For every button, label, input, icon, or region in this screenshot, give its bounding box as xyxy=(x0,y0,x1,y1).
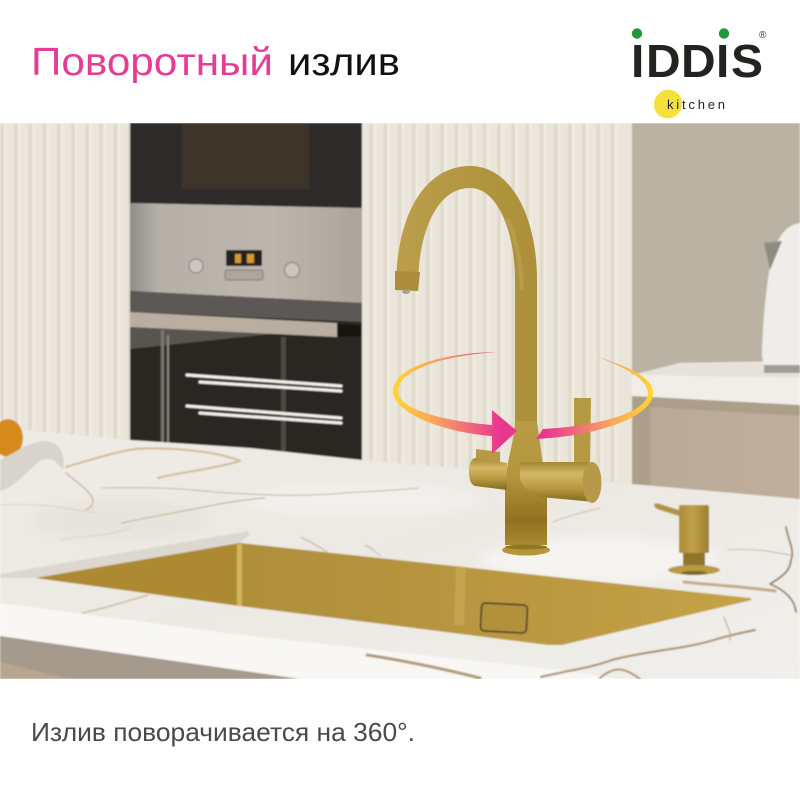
faucet body xyxy=(505,421,547,545)
left sculpture and fruit xyxy=(0,419,64,491)
counter front edge xyxy=(0,603,620,679)
logo: IDDIS kitchen: kitchen xyxy=(667,97,725,112)
title xyxy=(31,41,400,84)
panel: centre ribbed wall xyxy=(362,123,632,493)
marble veins xyxy=(0,448,796,679)
faucet base xyxy=(502,544,550,556)
wood cabinet below counter xyxy=(0,636,300,679)
title: Поворотный xyxy=(31,41,273,84)
rotation arrow left xyxy=(393,352,517,454)
rotation arrow right xyxy=(536,357,653,439)
logo: IDDIS kitchen: ® xyxy=(759,30,767,41)
kettle xyxy=(762,223,800,373)
logo: IDDIS kitchen xyxy=(631,28,767,124)
lever handle right xyxy=(574,398,591,470)
logo: IDDIS kitchen: IDDIS xyxy=(631,35,763,87)
spout tip xyxy=(395,271,420,294)
caption: Излив поворачивается на 360°. xyxy=(31,717,415,747)
faucet spout xyxy=(407,177,526,425)
left cylinder and small lever xyxy=(469,449,507,490)
pillar xyxy=(625,123,628,483)
faucet xyxy=(395,177,602,556)
right cylinder xyxy=(520,462,602,503)
right shelf counter and cabinet xyxy=(632,361,800,500)
kitchen photo xyxy=(0,123,800,679)
panel: left ribbed wall xyxy=(0,123,130,443)
soap dispenser xyxy=(654,503,720,575)
title: излив xyxy=(288,41,400,84)
sink xyxy=(0,531,752,645)
oven xyxy=(130,123,362,463)
rear wall and shelf xyxy=(631,123,800,376)
spout highlight xyxy=(507,218,522,290)
marble countertop xyxy=(0,428,800,679)
